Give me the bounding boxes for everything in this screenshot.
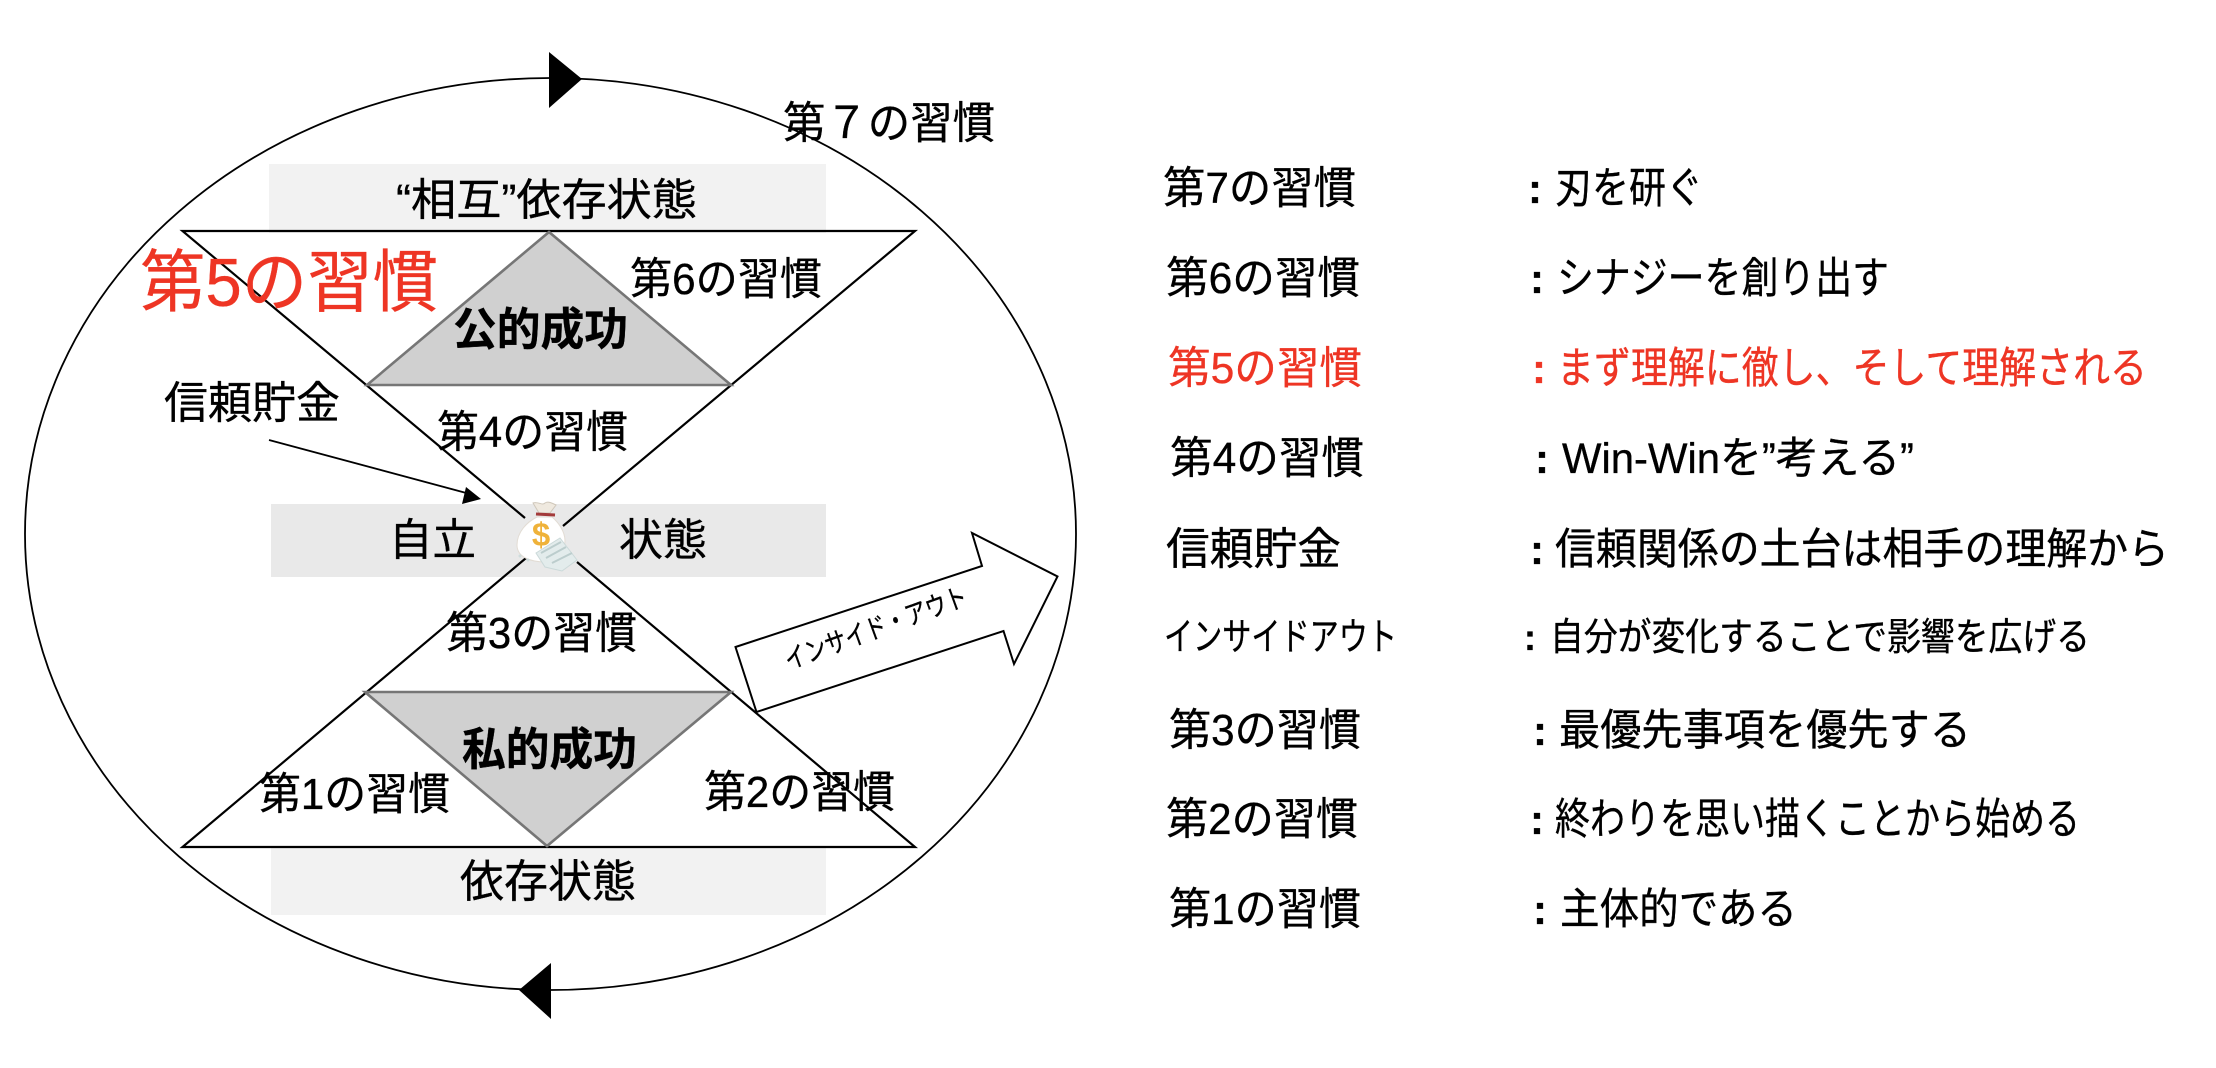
icon: money bag [517, 502, 577, 571]
row: habit 4: Win-Winを”考える” [1562, 435, 1914, 483]
row: habit 4: 第4の習慣 [1170, 434, 1364, 483]
row: emotional bank account: 信頼貯金 [1166, 525, 1341, 574]
label: habit 4: 第4の習慣 [437, 408, 628, 457]
upright triangle outline [182, 553, 915, 847]
row: inside-out [1164, 617, 2090, 659]
inverted triangle outline [182, 231, 915, 526]
row: habit 5 highlighted: : [1532, 345, 1546, 392]
arrow: pointing to bank account [269, 440, 481, 504]
row: habit 4: : [1535, 435, 1549, 482]
row: habit 7 [1163, 164, 1703, 213]
row: inside-out: 自分が変化することで影響を広げる [1550, 617, 2090, 659]
row: habit 7: 刃を研ぐ [1555, 165, 1703, 213]
row: habit 3 [1169, 706, 1971, 755]
row: emotional bank account [1166, 525, 2169, 574]
panel: habit list [1163, 164, 2169, 934]
band: independence [271, 504, 826, 577]
row: habit 6: 第6の習慣 [1166, 254, 1360, 303]
arrow: inside-out: インサイド・アウト [781, 582, 971, 675]
row: emotional bank account: 信頼関係の土台は相手の理解から [1555, 526, 2169, 574]
row: habit 1: : [1533, 886, 1547, 933]
row: habit 2: 終わりを思い描くことから始める [1555, 796, 2080, 844]
row: habit 7: 第7の習慣 [1163, 164, 1356, 213]
label: private victory: 私的成功 [462, 724, 637, 775]
row: habit 3: 第3の習慣 [1169, 706, 1361, 755]
label: interdependence: “相互”依存状態 [396, 176, 697, 225]
band: dependence [271, 847, 826, 915]
row: habit 3: 最優先事項を優先する [1559, 707, 1971, 755]
row: habit 6: : [1530, 255, 1544, 302]
row: emotional bank account: : [1530, 526, 1544, 573]
row: habit 6: シナジーを創り出す [1557, 255, 1889, 303]
arrowhead: bottom of cycle [519, 963, 551, 1019]
private victory triangle [365, 692, 731, 846]
diagram: habits cycle [25, 52, 1076, 1019]
row: inside-out: : [1524, 617, 1536, 658]
label: habit 1: 第1の習慣 [259, 770, 450, 819]
public victory triangle [367, 232, 731, 385]
row: habit 4 [1170, 434, 1914, 483]
label: habit 2: 第2の習慣 [704, 768, 895, 817]
label: dependence: 依存状態 [460, 856, 636, 907]
row: habit 1: 第1の習慣 [1169, 885, 1361, 934]
row: habit 6 [1166, 254, 1889, 303]
row: habit 3: : [1533, 707, 1547, 754]
row: habit 2: : [1530, 796, 1544, 843]
label: habit 5 highlighted: 第5の習慣 [140, 245, 438, 321]
arrowhead: top of cycle [549, 52, 582, 108]
label: independence right: 状態 [619, 516, 707, 565]
row: habit 2 [1166, 795, 2080, 844]
row: habit 2: 第2の習慣 [1166, 795, 1358, 844]
outer cycle ellipse [25, 78, 1076, 990]
label: habit 7: 第７の習慣 [783, 99, 995, 148]
row: habit 1: 主体的である [1560, 886, 1797, 934]
label: habit 6: 第6の習慣 [630, 255, 822, 304]
row: habit 5 highlighted [1168, 344, 2147, 393]
row: inside-out: インサイドアウト [1164, 617, 1397, 659]
label: public victory: 公的成功 [453, 304, 628, 355]
label: emotional bank account: 信頼貯金 [164, 379, 340, 428]
row: habit 7: : [1528, 165, 1542, 212]
band: interdependence [269, 164, 826, 233]
row: habit 1 [1169, 885, 1797, 934]
label: independence left: 自立 [389, 516, 476, 565]
icon: money bag: $ [532, 516, 550, 553]
row: habit 5 highlighted: 第5の習慣 [1168, 344, 1362, 393]
arrow: inside-out [736, 533, 1058, 712]
label: habit 3: 第3の習慣 [446, 609, 637, 658]
